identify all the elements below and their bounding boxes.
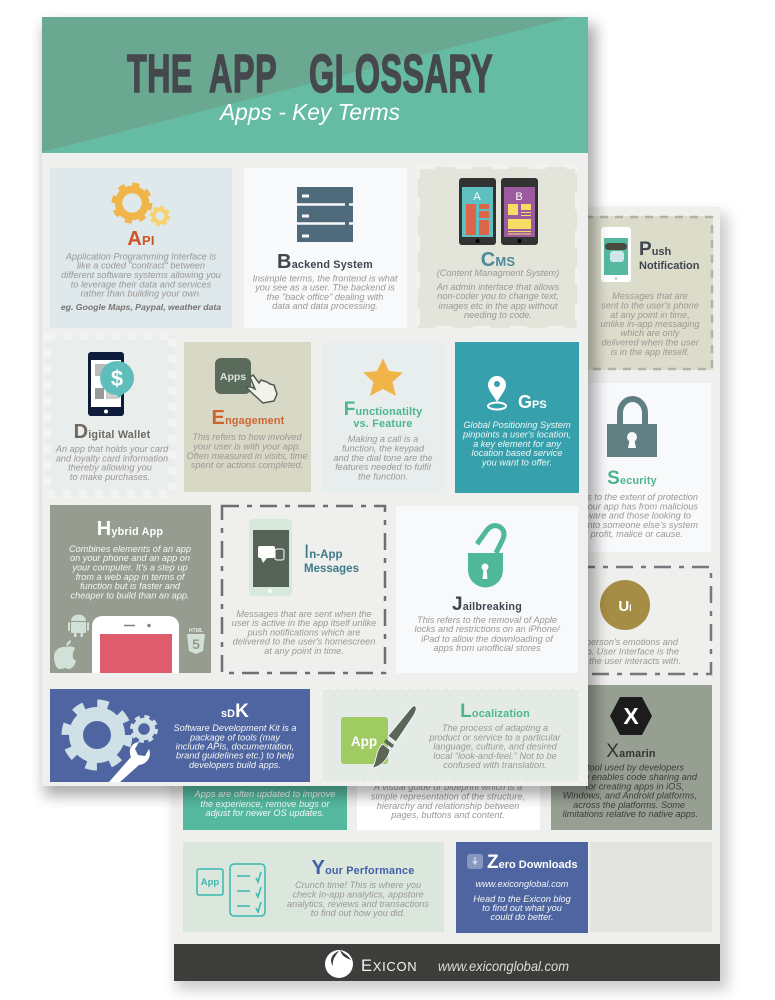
text: security description: break into someone else's system <box>560 520 698 530</box>
icon: phone with notification <box>601 227 631 282</box>
panel: backend system <box>244 168 407 328</box>
text: your performance description: to find out how you did. <box>311 908 405 918</box>
text: xamarin description: Windows, and Android platforms, <box>563 790 697 800</box>
icon: gears <box>114 185 168 224</box>
text: wireframe description: simple representation of the structure, <box>371 792 525 802</box>
heading: GPS: GPS <box>518 392 547 412</box>
text: functionality description: Making a call is a <box>348 434 418 444</box>
text: UI description: app. User Interface is the <box>576 646 679 656</box>
text: functionality description: and the dial tone are the <box>333 453 433 463</box>
panel: GPS <box>455 342 579 493</box>
text: CMS description: non-coder you to change text, <box>437 291 559 301</box>
text: localization description: The process of adapting a <box>442 723 548 733</box>
icon: exicon logo <box>325 950 353 978</box>
text: push notification description: sent to the user's phone <box>601 300 699 310</box>
text: digital wallet description: thereby allowing you <box>68 462 152 472</box>
icon: location pin <box>488 376 506 410</box>
text: in-app description: delivered to the user's homescreen <box>233 636 375 646</box>
text: API description: rather than building your own. <box>80 288 202 298</box>
heading: functionality vs feature: Functionatilty <box>344 399 422 420</box>
text: in-app description: Messages that are sent when the <box>236 609 372 619</box>
icon: HTML5 shield <box>187 628 205 654</box>
text: engagement description: your user is with your app. <box>192 442 301 452</box>
heading: localization: Localization <box>460 701 530 722</box>
text: wireframe description: pages, buttons and content. <box>390 810 505 820</box>
text: exicon wordmark: EXICON <box>361 957 417 975</box>
text: xamarin description: across the platforms. Some <box>573 800 685 810</box>
icon: HTML5 shield: HTML <box>189 628 203 634</box>
text: API examples: eg. Google Maps, Paypal, weather data <box>61 302 221 312</box>
text: engagement description: This refers to how involved <box>192 432 303 442</box>
text: zero downloads description: Head to the Exicon blog <box>473 894 572 904</box>
panel: push notification <box>540 216 713 370</box>
text: SDK description: Software Development Kit is a <box>173 723 297 733</box>
text: engagement description: spent or actions completed. <box>191 460 303 470</box>
text: website: www.exiconglobal.com <box>476 879 569 889</box>
heading: digital wallet: Digital Wallet <box>74 421 151 443</box>
text: API description: different software systems allowing you <box>61 270 221 280</box>
panel: wireframe <box>357 770 540 830</box>
text: API description: like a coded "contract" between <box>77 261 205 271</box>
text: your performance description: Crunch time! This is where you <box>295 880 421 890</box>
icon: app checklist: App <box>201 877 219 888</box>
text: CMS subtitle: (Content Managment System) <box>437 268 559 278</box>
title: APP <box>209 45 277 104</box>
text: in-app description: user is active in the app itself unlike <box>232 618 376 628</box>
text: GPS description: pinpoints a user's location, <box>462 430 571 440</box>
text: GPS description: a key element for any <box>473 439 562 449</box>
text: GPS description: Global Positioning System <box>463 420 571 430</box>
panel: digital wallet <box>46 334 173 495</box>
panel: hybrid app <box>50 505 211 673</box>
panel: zero downloads <box>456 842 588 933</box>
heading: CMS: CMS <box>481 249 515 271</box>
text: CMS description: An admin interface that allows <box>436 282 560 292</box>
text: digital wallet description: and loyalty card information <box>56 454 168 464</box>
text: wireframe description: hierarchy and relationship between <box>377 801 519 811</box>
text: backend description: you see as a user. The backend is <box>254 283 395 293</box>
panel: localization <box>322 689 579 782</box>
text: push notification description: delivered when the user <box>601 338 700 348</box>
text: localization description: language, culture, and desired <box>433 742 558 752</box>
panel: security <box>533 383 711 552</box>
text: updates description: the experience, remove bugs or <box>200 799 331 809</box>
text: your performance description: analytics, reviews and transactions <box>287 899 429 909</box>
text: security description: Security refers to the extent of protection <box>533 492 698 502</box>
panel: jailbreaking <box>396 506 578 673</box>
icon: padlock <box>607 399 657 457</box>
back sheet <box>174 207 728 990</box>
icon: phone with chat <box>249 519 292 596</box>
icon: apps tile and hand cursor: Apps <box>220 371 246 383</box>
icon: two phones: B <box>515 191 523 203</box>
text: backend description: the "back office" dealing with <box>267 292 383 302</box>
text: engagement description: Often measured in visits, time <box>186 451 308 461</box>
icon: xamarin hexagon <box>610 697 652 735</box>
text: localization description: confused with translation. <box>443 760 547 770</box>
text: your performance description: check in-app analytics, appstore <box>292 890 424 900</box>
text: zero downloads description: could do better. <box>490 912 554 922</box>
icon: app tile with paintbrush: App <box>351 734 377 749</box>
icon: app checklist <box>197 864 265 916</box>
text: xamarin description: which enables code sharing and <box>566 772 698 782</box>
icon: download <box>467 854 483 869</box>
panel: CMS <box>418 167 577 328</box>
heading: backend system: Backend System <box>277 251 373 273</box>
text: xamarin description: limitations relative to native apps. <box>563 809 698 819</box>
panel: in-app messages <box>222 506 385 673</box>
icon: apps tile and hand cursor <box>215 358 277 403</box>
text: functionality description: features needed to fulfil <box>335 462 432 472</box>
text: security description: for profit, malice or cause. <box>577 529 683 539</box>
text: push notification description: unlike in-app messaging <box>600 319 700 329</box>
icon: UI badge <box>600 580 650 630</box>
icon: star <box>363 358 403 396</box>
heading: SDK: sDK <box>221 701 249 722</box>
front sheet <box>42 17 588 786</box>
text: CMS description: images etc in the app without <box>438 301 558 311</box>
text: security description: software and those looking to <box>571 510 691 520</box>
icon: UI badge: UI <box>618 598 632 615</box>
title: GLOSSARY <box>309 45 493 104</box>
heading: your performance: Your Performance <box>312 857 414 879</box>
text: CMS description: needing to code. <box>464 310 532 320</box>
icon: two phones: A <box>473 191 481 203</box>
icon: two phones <box>459 178 538 245</box>
text: hybrid description: on your phone and an app on <box>70 553 190 563</box>
panel: your performance <box>183 842 444 932</box>
icon: apple <box>54 640 76 669</box>
text: jailbreaking description: apps from unofficial stores <box>433 643 541 653</box>
footer <box>174 944 720 981</box>
text: digital wallet description: to make purchases. <box>70 472 150 482</box>
text: footer url: www.exiconglobal.com <box>438 959 569 974</box>
panel: in-app messages: Messages <box>304 563 359 575</box>
panel: functionality vs feature <box>322 342 444 492</box>
heading: push notification: Push <box>639 239 672 260</box>
icon: open padlock <box>468 526 504 588</box>
text: push notification description: is in the app iteself. <box>611 347 689 357</box>
text: GPS description: location based service <box>472 448 562 458</box>
heading: engagement: Engagement <box>212 407 285 429</box>
text: API description: to leverage their data and services <box>71 279 212 289</box>
icon: phone with dollar bubble: $ <box>111 366 123 391</box>
text: hybrid description: function but is faster and <box>80 581 181 591</box>
text: UI description: a person's emotions and <box>578 637 679 647</box>
text: hybrid description: from a web app in terms of <box>76 572 186 582</box>
subtitle: Apps - Key Terms <box>218 99 400 125</box>
text: in-app description: push notifications which are <box>247 628 360 638</box>
heading: security: Security <box>607 468 657 489</box>
icon: server racks <box>297 187 353 242</box>
text: jailbreaking description: This refers to the removal of Apple <box>417 615 557 625</box>
text: localization description: product or service to a particular <box>428 732 562 742</box>
title: THE <box>127 45 192 104</box>
heading: API: API <box>127 228 155 250</box>
text: GPS description: you want to offer. <box>481 458 552 468</box>
heading: in-app messages: In-App <box>304 542 342 563</box>
panel: API <box>50 168 232 328</box>
panel: UI <box>540 567 711 674</box>
text: hybrid description: your computer. It's a step up <box>71 562 188 572</box>
text: xamarin description: for creating apps in iOS, <box>585 782 684 792</box>
text: SDK description: developers build apps. <box>189 760 281 770</box>
text: SDK description: brand guidelines etc.) to help <box>176 750 294 760</box>
text: API description: Application Programming Interface is <box>65 252 216 262</box>
icon: xamarin hexagon: X <box>623 703 639 729</box>
panel: engagement <box>184 342 311 492</box>
text: push notification description: Messages that are <box>612 291 688 301</box>
text: updates description: Apps are often updated to improve <box>194 789 335 799</box>
text: SDK description: package of tools (may <box>189 732 281 742</box>
text: backend description: data and data processing. <box>272 301 378 311</box>
title <box>127 45 493 104</box>
heading: zero downloads: Zero Downloads <box>487 852 577 873</box>
text: security description: your app has from malicious <box>582 502 698 512</box>
front sheet shadow <box>44 24 596 796</box>
panel: SDK <box>50 689 310 782</box>
text: functionality description: function, the keypad <box>342 444 425 454</box>
panel: push notification: Notification <box>639 260 700 272</box>
icon: app tile with paintbrush <box>341 706 416 768</box>
icon: phone <box>92 616 179 673</box>
text: SDK description: include APIs, documentation, <box>176 742 294 752</box>
panel: xamarin <box>551 685 712 830</box>
text: hybrid description: cheaper to build than an app. <box>70 590 190 600</box>
panel: updates <box>183 770 347 830</box>
heading: hybrid app: Hybrid App <box>97 518 163 540</box>
text: zero downloads description: to find out what you <box>482 903 562 913</box>
icon: phone with dollar bubble <box>88 352 134 416</box>
text: push notification description: which are only <box>621 328 681 338</box>
icon: HTML5 shield: 5 <box>192 636 200 652</box>
text: jailbreaking description: locks and restrictions on an iPhone/ <box>414 624 561 634</box>
text: xamarin description: A tool used by developers <box>578 762 684 772</box>
text: localization description: local "look-and-feel." Not to be <box>433 751 557 761</box>
text: digital wallet description: An app that holds your card <box>55 444 169 454</box>
text: backend description: Insimple terms, the frontend is what <box>252 274 398 284</box>
text: UI description: what the user interacts with. <box>567 656 681 666</box>
text: hybrid description: Combines elements of an app <box>69 544 191 554</box>
text: in-app description: at any point in time. <box>264 646 344 656</box>
text: updates description: adjust for newer OS updates. <box>206 808 324 818</box>
heading: xamarin: Xamarin <box>606 741 656 762</box>
text: functionality description: the function. <box>358 472 408 482</box>
header banner <box>42 17 588 153</box>
text: jailbreaking description: iPad to allow the downloading of <box>421 634 554 644</box>
heading: jailbreaking: Jailbreaking <box>452 594 522 615</box>
text: wireframe description: A visual guide or blueprint which is a <box>373 782 522 792</box>
text: push notification description: at any point in time, <box>610 310 690 320</box>
panel: functionality vs feature: vs. Feature <box>353 418 413 430</box>
icon: gears and wrench <box>66 704 156 782</box>
icon: android <box>68 615 89 637</box>
panel: empty <box>590 842 712 932</box>
